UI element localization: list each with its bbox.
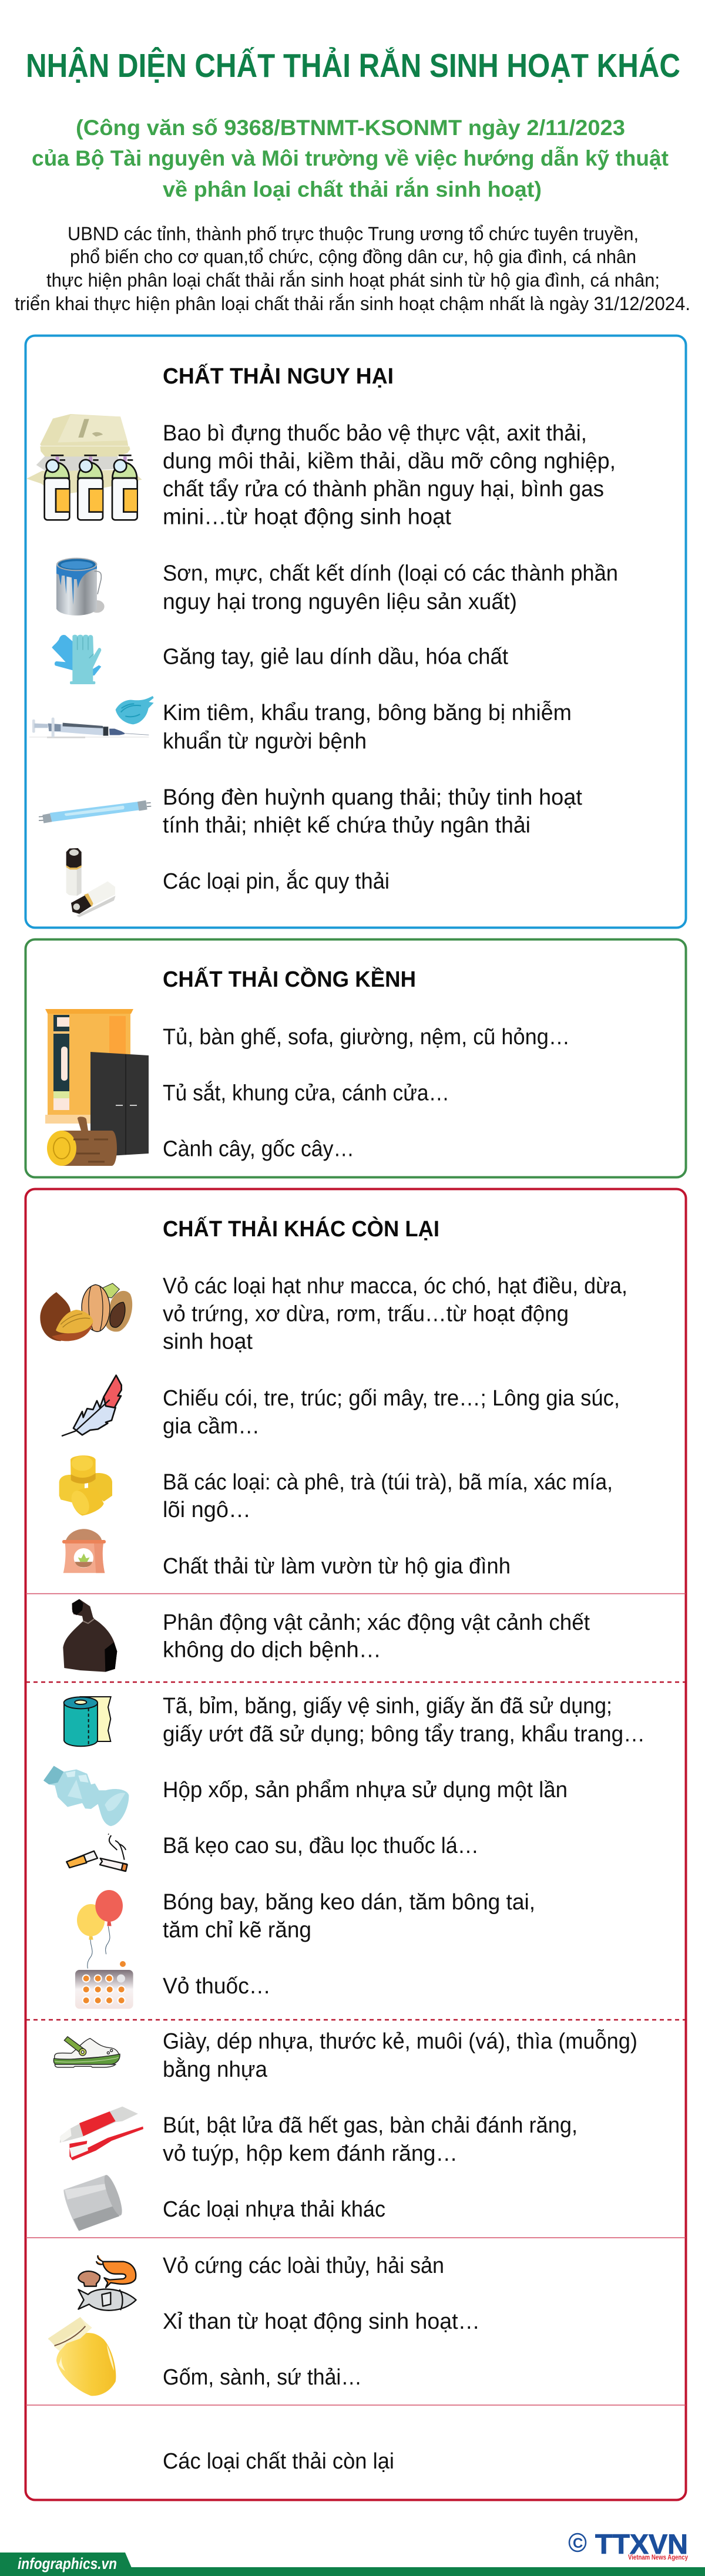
text: tã bỉm: giấy ướt đã sử dụng; bông tẩy trang, khẩu trang…: [163, 1722, 645, 1747]
icon: cigarette butts: [66, 1834, 127, 1871]
text: vỏ hạt: vỏ trứng, xơ dừa, rơm, trấu…từ hoạt động: [163, 1302, 569, 1326]
text: phân động vật: Phân động vật cảnh; xác động vật cảnh chết: [163, 1610, 590, 1635]
intro paragraph: phổ biến cho cơ quan,tổ chức, cộng đồng dân cư, hộ gia đình, cá nhân: [70, 246, 636, 267]
text: tủ sắt: Tủ sắt, khung cửa, cánh cửa…: [163, 1081, 449, 1105]
text: chiếu cói: gia cầm…: [163, 1414, 260, 1439]
logo: TTXVN: C: [573, 2535, 583, 2551]
text: bóng đèn: Bóng đèn huỳnh quang thải; thủy tinh hoạt: [163, 785, 582, 810]
intro paragraph: [15, 223, 690, 314]
icon: paint bucket: [56, 558, 105, 616]
footer band: [0, 2553, 705, 2576]
footer url: infographics.vn: [18, 2555, 117, 2572]
heading: chất thải khác còn lại: CHẤT THẢI KHÁC CÒN LẠI: [163, 1216, 439, 1242]
text: phân động vật: không do dịch bệnh…: [163, 1637, 381, 1662]
text: giày dép: Giày, dép nhựa, thước kẻ, muôi (vá), thìa (muỗng): [163, 2029, 637, 2054]
text: bút: vỏ tuýp, hộp kem đánh răng…: [163, 2141, 458, 2166]
text: sơn: Sơn, mực, chất kết dính (loại có các thành phần: [163, 561, 618, 586]
icon: fluorescent tube: [39, 801, 151, 823]
text: bao bì: mini…từ hoạt động sinh hoạt: [163, 505, 451, 530]
text: vỏ cứng: Vỏ cứng các loài thủy, hải sản: [163, 2254, 444, 2278]
text: bóng bay: Bóng bay, băng keo dán, tăm bông tai,: [163, 1890, 535, 1915]
text: kim tiêm: khuẩn từ người bệnh: [163, 729, 367, 754]
icon: nuts: [40, 1283, 132, 1341]
icon: blister pack: [75, 1961, 133, 2009]
subtitle: [32, 116, 669, 201]
text: nhựa thải: Các loại nhựa thải khác: [163, 2197, 385, 2222]
icon: ceramic jar: [48, 2317, 116, 2396]
text: bao bì: Bao bì đựng thuốc bảo vệ thực vật, axit thải,: [163, 421, 587, 446]
text: giày dép: bằng nhựa: [163, 2057, 268, 2082]
text: bao bì: [163, 421, 616, 530]
icon: bales: [59, 1455, 112, 1517]
icon: compost sack: [62, 1529, 106, 1573]
text: giày dép: [163, 2029, 637, 2082]
text: pin: Các loại pin, ắc quy thải: [163, 869, 390, 894]
text: kim tiêm: Kim tiêm, khẩu trang, bông băng bị nhiễm: [163, 700, 572, 725]
icon: paper roll: [64, 1697, 111, 1746]
intro paragraph: triển khai thực hiện phân loại chất thải rắn sinh hoạt chậm nhất là ngày 31/12/2024.: [15, 293, 690, 314]
heading: chất thải cồng kềnh: CHẤT THẢI CỒNG KỀNH: [163, 966, 416, 992]
panel: chất thải khác còn lại: [26, 1189, 686, 2500]
icon: toothpaste and toothbrush: [60, 2107, 143, 2160]
icon: plastic can: [63, 2173, 125, 2231]
intro paragraph: thực hiện phân loại chất thải rắn sinh hoạt phát sinh từ hộ gia đình, cá nhân;: [46, 270, 660, 291]
text: vỏ hạt: [163, 1274, 627, 1354]
text: xỉ than: Xỉ than từ hoạt động sinh hoạt…: [163, 2309, 480, 2334]
logo: TTXVN: TTXVN: [595, 2528, 688, 2560]
text: gốm sành sứ: Gốm, sành, sứ thải…: [163, 2365, 362, 2390]
icon: feather: [62, 1376, 122, 1436]
text: tã bỉm: [163, 1694, 645, 1747]
text: hộp xốp: Hộp xốp, sản phẩm nhựa sử dụng một lần: [163, 1778, 568, 1802]
text: kim tiêm: [163, 700, 572, 754]
text: tã bỉm: Tã, bỉm, băng, giấy vệ sinh, giấy ăn đã sử dụng;: [163, 1694, 612, 1719]
text: vỏ hạt: Vỏ các loại hạt như macca, óc chó, hạt điều, dừa,: [163, 1274, 627, 1299]
intro paragraph: UBND các tỉnh, thành phố trực thuộc Trung ương tổ chức tuyên truyền,: [68, 223, 639, 244]
text: bóng bay: tăm chỉ kẽ răng: [163, 1918, 311, 1943]
text: bã: Bã các loại: cà phê, trà (túi trà), bã mía, xác mía,: [163, 1470, 613, 1495]
text: bút: [163, 2113, 578, 2166]
text: chiếu cói: Chiếu cói, tre, trúc; gối mây, tre…; Lông gia súc,: [163, 1386, 620, 1411]
text: vỏ hạt: sinh hoạt: [163, 1330, 253, 1354]
text: sơn: [163, 561, 618, 614]
icon: black bag: [63, 1599, 117, 1672]
text: sơn: nguy hại trong nguyên liệu sản xuất): [163, 590, 517, 614]
text: phân động vật: [163, 1610, 590, 1662]
text: cành cây: Cành cây, gốc cây…: [163, 1137, 354, 1162]
icon: gloves: [52, 635, 101, 684]
text: bóng đèn: [163, 785, 582, 838]
icon: plastic clog: [53, 2037, 120, 2067]
icon: packaging bags and gas bottles: [26, 414, 142, 520]
text: các loại chất thải còn lại: Các loại chất thải còn lại: [163, 2449, 394, 2474]
icon: balloons: [77, 1890, 123, 1969]
panel: chất thải cồng kềnh: [26, 940, 686, 1177]
text: tủ bàn ghế: Tủ, bàn ghế, sofa, giường, nệm, cũ hỏng…: [163, 1025, 570, 1050]
text: làm vườn: Chất thải từ làm vườn từ hộ gia đình: [163, 1554, 511, 1579]
text: bóng bay: [163, 1890, 535, 1943]
icon: crushed plastic bottle: [43, 1766, 129, 1826]
text: bao bì: chất tẩy rửa có thành phần nguy hại, bình gas: [163, 477, 604, 502]
heading: chất thải nguy hại: CHẤT THẢI NGUY HẠI: [163, 363, 394, 389]
icon: wardrobes and log: [45, 1009, 149, 1166]
text: bã kẹo: Bã kẹo cao su, đầu lọc thuốc lá…: [163, 1834, 479, 1858]
text: bã: lõi ngô…: [163, 1498, 251, 1522]
text: chiếu cói: [163, 1386, 620, 1439]
text: bóng đèn: tính thải; nhiệt kế chứa thủy ngân thải: [163, 813, 531, 838]
icon: seafood: [78, 2255, 136, 2311]
text: bã: [163, 1470, 613, 1522]
text: găng tay: Găng tay, giẻ lau dính dầu, hóa chất: [163, 645, 508, 670]
subtitle: về phân loại chất thải rắn sinh hoạt): [163, 177, 542, 201]
icon: batteries: [66, 848, 116, 917]
text: vỏ thuốc: Vỏ thuốc…: [163, 1974, 271, 1999]
subtitle: (Công văn số 9368/BTNMT-KSONMT ngày 2/11/2023: [76, 116, 625, 140]
subtitle: của Bộ Tài nguyên và Môi trường về việc hướng dẫn kỹ thuật: [32, 146, 669, 170]
panel: chất thải nguy hại: [26, 336, 686, 928]
icon: mask and syringe: [29, 696, 154, 738]
text: bao bì: dung môi thải, kiềm thải, dầu mỡ công nghiệp,: [163, 449, 616, 473]
logo: TTXVN: Vietnam News Agency: [628, 2553, 688, 2561]
text: bút: Bút, bật lửa đã hết gas, bàn chải đánh răng,: [163, 2113, 578, 2138]
